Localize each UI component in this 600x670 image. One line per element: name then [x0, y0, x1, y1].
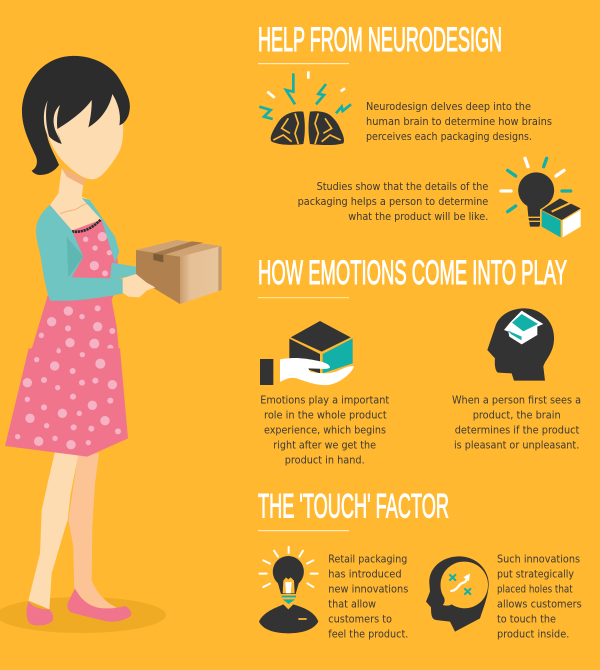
icon: light bulb with box: [501, 158, 583, 239]
dress skirt: [5, 348, 128, 457]
text: retail packaging: new innovations: [328, 584, 408, 596]
text: emotions: right after we get the: [273, 440, 376, 452]
text: retail packaging: [328, 554, 408, 641]
icon: brain with lightning bolts: [259, 71, 351, 145]
text: retail packaging: that allow: [328, 599, 376, 611]
text: studies: Studies show that the details of the: [317, 181, 488, 193]
face and neck: [45, 80, 123, 232]
hair: [22, 56, 130, 175]
text: first sees: [452, 395, 581, 452]
floor shadow: [0, 597, 166, 633]
text: first sees: product, the brain: [473, 410, 561, 422]
text: studies: packaging helps a person to determine: [298, 196, 488, 208]
text: emotions: Emotions play a important: [260, 395, 389, 407]
text: retail packaging: customers to: [328, 614, 392, 626]
text: retail packaging: has introduced: [328, 569, 402, 581]
icon: head with strategy plan: [426, 556, 489, 632]
icon: person with light bulb head: [259, 547, 318, 633]
text: such innovations: placed holes that: [497, 584, 573, 596]
text: such innovations: put strategically: [497, 569, 574, 581]
text: such innovations: [497, 554, 582, 641]
text: emotions: [260, 395, 389, 467]
text: emotions: product in hand.: [285, 455, 365, 467]
woman illustration holding a box: [0, 56, 222, 633]
cardboard box: [136, 240, 222, 304]
hand: [123, 274, 155, 297]
cardigan and far arm: [36, 198, 136, 301]
text: such innovations: product inside.: [497, 629, 569, 641]
text: first sees: is pleasant or unpleasant.: [454, 440, 579, 452]
text: first sees: When a person first sees a: [452, 395, 581, 407]
text: neurodesign intro: perceives each packaging designs.: [366, 131, 532, 143]
icon: hand holding box: [260, 321, 354, 385]
text: emotions: experience, which begins: [264, 425, 386, 437]
text: studies: [298, 181, 488, 223]
text: studies: what the product will be like.: [348, 211, 488, 223]
text: such innovations: to touch the: [497, 614, 556, 626]
text: such innovations: Such innovations: [497, 554, 580, 566]
legs and shoes: [27, 452, 131, 626]
text: such innovations: allows customers: [497, 599, 582, 611]
text: retail packaging: Retail packaging: [328, 554, 407, 566]
dress: [27, 219, 120, 363]
text: neurodesign intro: human brain to determine how brains: [366, 116, 552, 128]
icon: head with open box: [487, 308, 554, 381]
text: retail packaging: feel the product.: [328, 629, 408, 641]
text: neurodesign intro: [366, 101, 552, 143]
text: emotions: role in the whole product: [264, 410, 387, 422]
text: neurodesign intro: Neurodesign delves deep into the: [366, 101, 531, 113]
text: first sees: determines if the product: [455, 425, 579, 437]
